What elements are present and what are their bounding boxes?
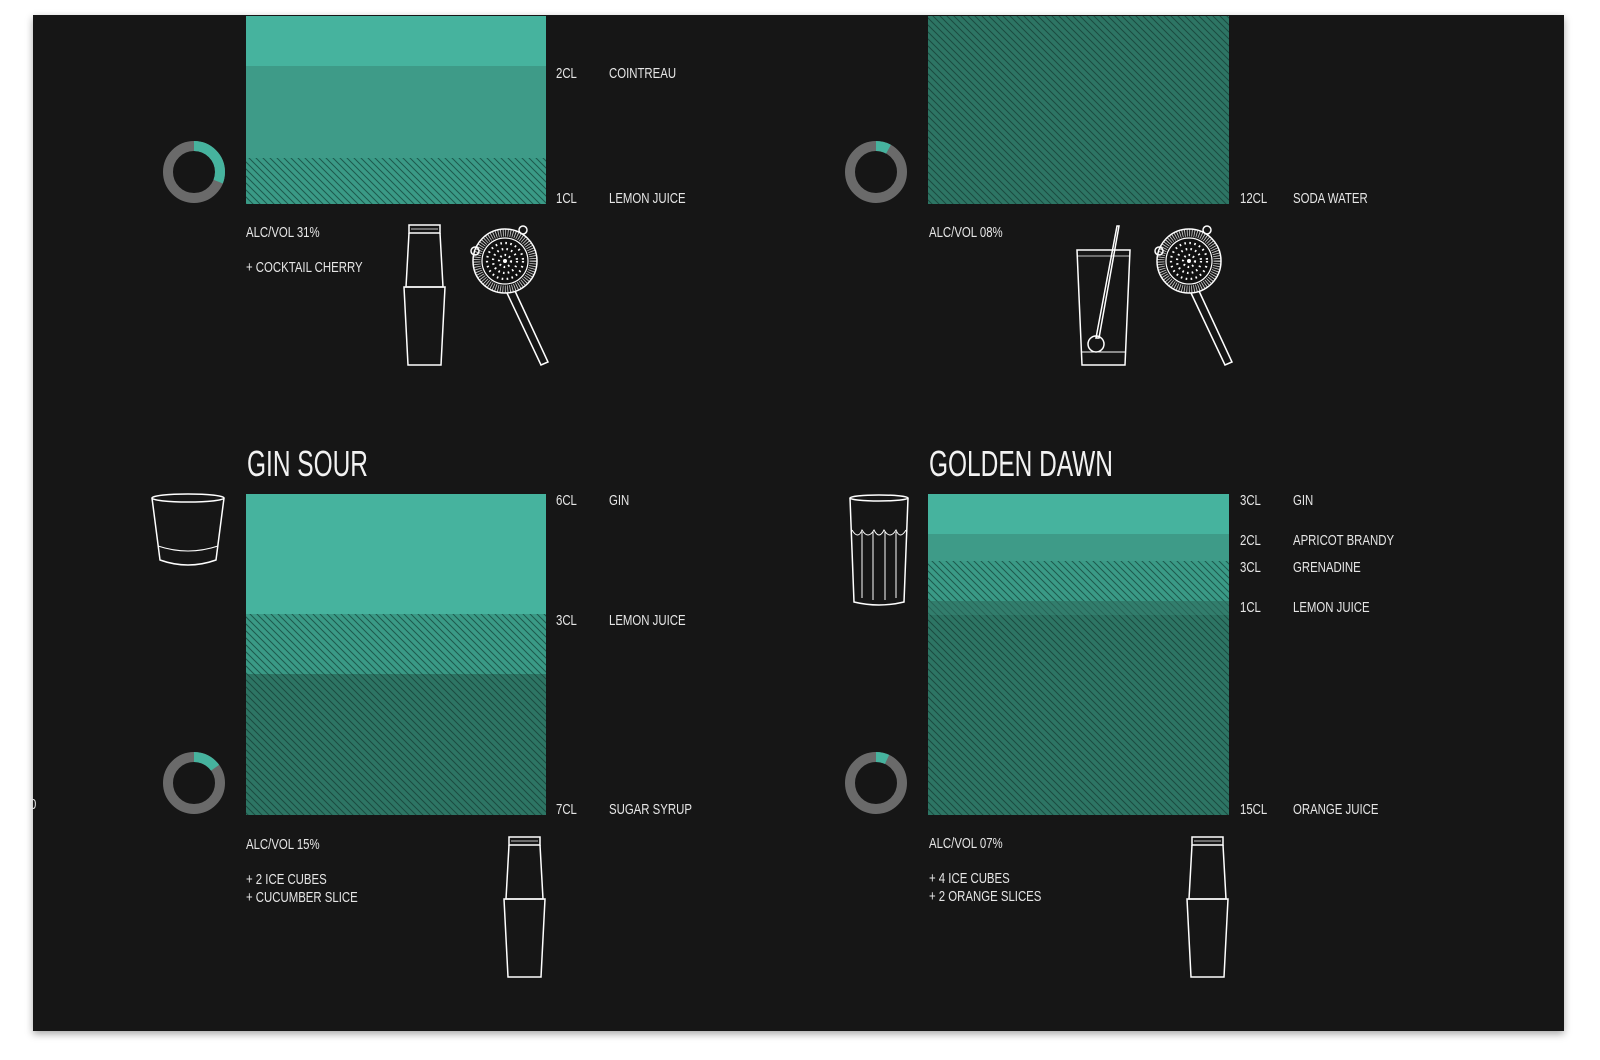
icon: rocks glass — [152, 494, 224, 565]
donut: 31% — [168, 146, 220, 198]
info text: ALC/VOL 15% — [246, 835, 320, 852]
labels: top-right: SODA WATER — [1293, 189, 1368, 206]
labels: gin sour: 7CL — [556, 800, 577, 817]
info text: + 2 ORANGE SLICES — [929, 887, 1041, 904]
icon: shaker — [504, 837, 545, 977]
labels: golden dawn: ORANGE JUICE — [1293, 800, 1379, 817]
icon: tall faceted glass — [850, 495, 908, 605]
donut: 15% — [168, 757, 220, 809]
donut: 7% — [850, 757, 902, 809]
bar chart: top-right — [928, 16, 1229, 204]
title: gin sour: GIN SOUR — [247, 443, 368, 484]
labels: top-left: LEMON JUICE — [609, 189, 686, 206]
labels: top-right — [1240, 189, 1368, 206]
labels: golden dawn: 2CL — [1240, 531, 1261, 548]
info text: ALC/VOL 08% — [929, 223, 1003, 240]
labels: top-right: 12CL — [1240, 189, 1267, 206]
donut: 8% — [850, 146, 902, 198]
info text: ALC/VOL 07% — [929, 834, 1003, 851]
info text — [929, 834, 1041, 904]
info text: ALC/VOL 31% — [246, 223, 320, 240]
info text: + 4 ICE CUBES — [929, 869, 1010, 886]
labels: golden dawn: LEMON JUICE — [1293, 598, 1370, 615]
cut-off edge character: 0 — [30, 795, 36, 812]
bar chart: golden dawn — [928, 494, 1229, 815]
title: golden dawn: GOLDEN DAWN — [929, 443, 1113, 484]
labels: top-left: 1CL — [556, 189, 577, 206]
labels: top-left: 2CL — [556, 64, 577, 81]
labels: golden dawn: GIN — [1293, 491, 1313, 508]
cocktail: gin sour — [152, 443, 692, 977]
labels: gin sour — [556, 491, 692, 817]
cocktail top-right — [850, 16, 1368, 365]
icon: strainer — [471, 226, 548, 365]
labels: top-left — [556, 64, 686, 206]
info text: + CUCUMBER SLICE — [246, 888, 358, 905]
labels: gin sour: GIN — [609, 491, 629, 508]
labels: golden dawn: APRICOT BRANDY — [1293, 531, 1394, 548]
labels: gin sour: LEMON JUICE — [609, 611, 686, 628]
icon: shaker — [1187, 837, 1228, 977]
labels: golden dawn: 3CL — [1240, 491, 1261, 508]
cocktail: golden dawn — [850, 443, 1394, 977]
labels: golden dawn — [1240, 491, 1394, 817]
info text: + 2 ICE CUBES — [246, 870, 327, 887]
labels: top-left: COINTREAU — [609, 64, 676, 81]
info text — [246, 835, 358, 905]
bar chart: top-left — [246, 16, 546, 204]
icon: strainer — [1155, 226, 1232, 365]
labels: golden dawn: 3CL — [1240, 558, 1261, 575]
labels: gin sour: 6CL — [556, 491, 577, 508]
icon: shaker — [404, 225, 445, 365]
labels: golden dawn: 15CL — [1240, 800, 1267, 817]
labels: golden dawn: 1CL — [1240, 598, 1261, 615]
labels: gin sour: SUGAR SYRUP — [609, 800, 692, 817]
info text — [246, 223, 363, 275]
labels: gin sour: 3CL — [556, 611, 577, 628]
icon: collins glass with spoon — [1077, 226, 1130, 365]
labels: golden dawn: GRENADINE — [1293, 558, 1361, 575]
bar chart: gin sour — [246, 494, 546, 815]
cocktail top-left — [168, 16, 686, 365]
info text: + COCKTAIL CHERRY — [246, 258, 363, 275]
